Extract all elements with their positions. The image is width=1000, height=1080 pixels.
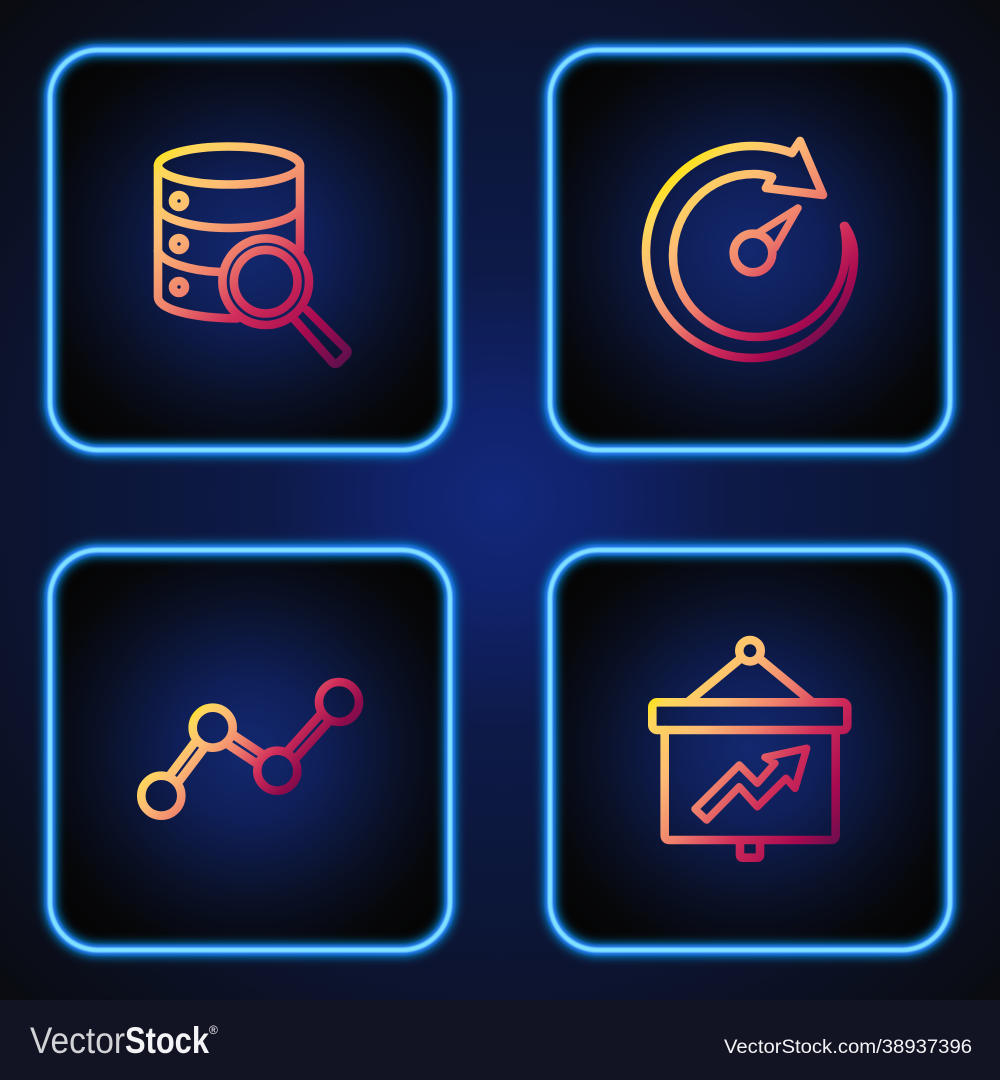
panel: presentation board — [550, 550, 950, 950]
logo text: ® — [209, 1023, 218, 1037]
panel: line graph — [50, 550, 450, 950]
logo text: VectorStock — [30, 1020, 226, 1061]
icon: circular arrow with gauge — [646, 141, 854, 358]
icon: connected nodes chart — [141, 682, 359, 816]
image id text: VectorStock.com/38937396 — [724, 1037, 972, 1058]
icon: hanging board with rising arrow — [652, 640, 847, 858]
panel: database search — [50, 50, 450, 450]
icon: database with magnifier — [158, 146, 348, 364]
panel: speedometer refresh — [550, 50, 950, 450]
footer bar — [0, 1000, 1000, 1080]
